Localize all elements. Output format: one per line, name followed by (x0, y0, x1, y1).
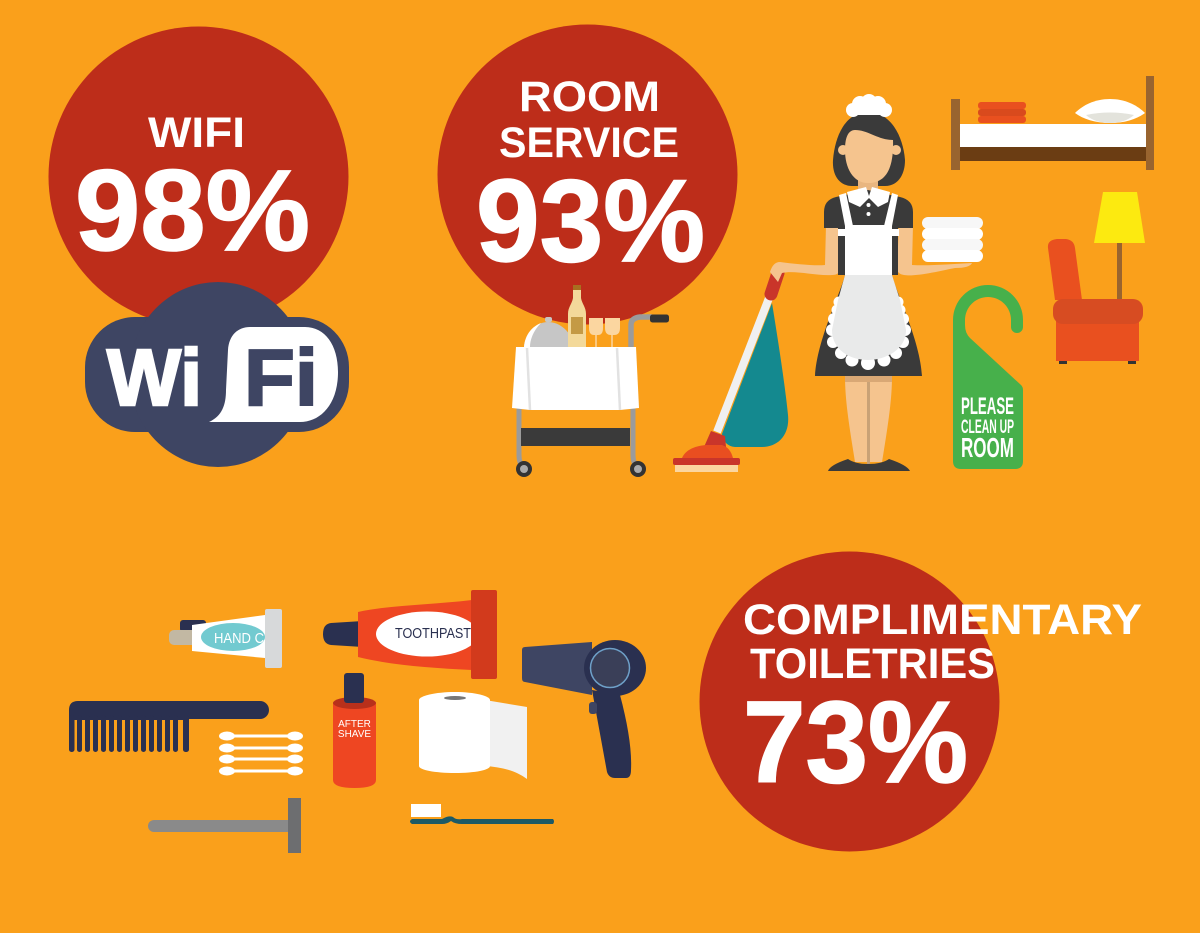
dress skirt (815, 275, 922, 376)
icon: toothpaste tube: TOOTHPAST (395, 626, 471, 642)
toiletries circle (700, 552, 1000, 852)
hair (833, 112, 905, 186)
wifi circle (48, 26, 348, 326)
room service heading: SERVICE (499, 119, 679, 167)
icon: toothpaste tube (323, 590, 497, 679)
icon: toilet paper roll (419, 692, 527, 779)
room service heading: ROOM (519, 73, 660, 121)
icon: toothbrush (410, 804, 554, 824)
icon: door hanger: ROOM (961, 432, 1014, 463)
panel: room service stat (438, 24, 738, 477)
apron bib (838, 225, 899, 275)
icon: vacuum cleaner (673, 273, 788, 472)
room service heading (499, 73, 679, 167)
face (838, 130, 901, 183)
icon: after shave bottle (333, 673, 376, 788)
toiletries heading (743, 596, 1142, 688)
wifi percentage: 98% (75, 147, 310, 275)
icon: wifi logo (85, 282, 349, 467)
wifi heading: WIFI (148, 109, 245, 157)
shoes (828, 459, 910, 471)
icon: bed (951, 76, 1154, 170)
room service percentage: 93% (476, 155, 705, 286)
collar (847, 187, 890, 207)
icon: hair dryer (522, 640, 646, 778)
stacked towels (922, 217, 983, 262)
icon: cotton swabs (219, 732, 303, 776)
toiletries heading: TOILETRIES (750, 640, 995, 688)
dress top (824, 190, 913, 275)
icon: razor (148, 798, 301, 853)
toiletries percentage: 73% (743, 677, 968, 807)
panel: wifi stat (48, 26, 349, 467)
icon: room service cart (512, 285, 669, 477)
icon: armchair (1048, 239, 1143, 364)
arms (770, 225, 840, 282)
icon: wifi logo: Wi (107, 333, 202, 422)
icon: floor lamp (1094, 192, 1145, 300)
apron straps (839, 193, 898, 226)
icon: door hanger (953, 285, 1023, 469)
icon: hand cream tube: HAND C (214, 631, 264, 647)
legs (845, 376, 892, 462)
icon: wifi logo: Fi (244, 333, 318, 422)
icon: maid figure (770, 94, 983, 471)
apron skirt (826, 275, 911, 370)
icon: door hanger: CLEAN UP (961, 417, 1014, 438)
cap (846, 94, 892, 117)
toiletries heading: COMPLIMENTARY (743, 596, 1142, 644)
icon: door hanger: PLEASE (961, 393, 1014, 420)
icon: after shave bottle: SHAVE (338, 729, 371, 740)
icon: after shave bottle: AFTER (338, 719, 371, 730)
icon: comb (69, 701, 269, 752)
panel: toiletries stat (700, 552, 1142, 852)
neck (858, 176, 878, 196)
icon: hand cream tube (169, 609, 282, 668)
room service circle (438, 24, 738, 324)
